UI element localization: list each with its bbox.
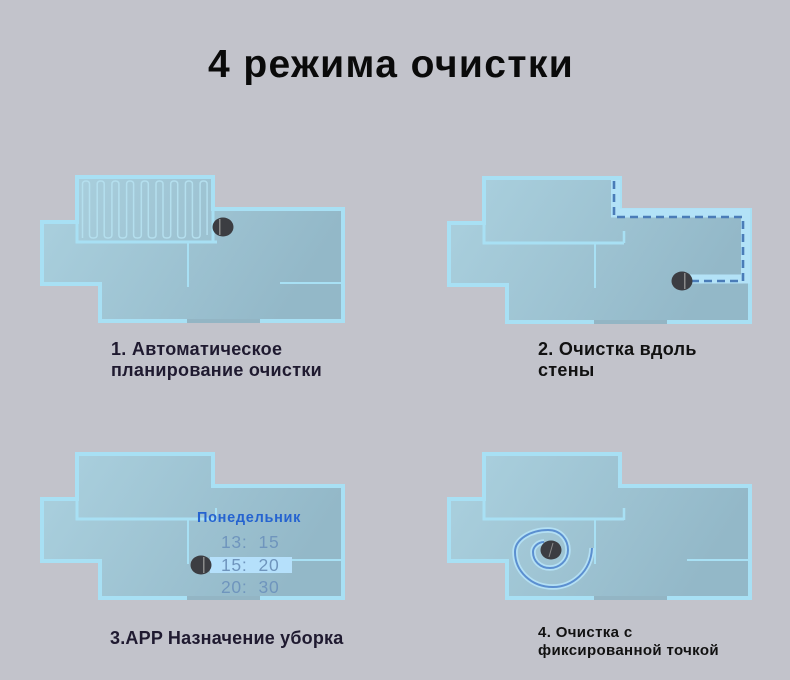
spiral path [515,530,592,587]
cleaning path zigzag [82,181,207,238]
spiral glow [515,530,592,587]
caption 2: 2. Очистка вдоль [538,339,697,359]
panel: map 3 app schedule [42,454,343,600]
day label: Понедельник [197,510,301,526]
caption 3: 3.APP Назначение уборка [110,628,343,648]
icon: robot vacuum [212,218,234,236]
icon: robot vacuum [540,540,562,560]
icon: robot vacuum [190,556,212,574]
dashed wall path [614,181,743,281]
selected time highlight [210,557,292,573]
caption 2: стены [538,360,595,380]
caption 4 [538,624,719,659]
panel: map 2 along the wall [449,178,750,324]
caption 1 [111,339,322,380]
time options: 13: 15 [221,532,279,552]
time options: 15: 20 [221,555,279,575]
panel: map 4 spot cleaning [449,454,750,600]
cleaning path highlight [616,180,746,279]
caption 4: 4. Очистка с [538,624,633,641]
caption 2 [538,339,697,380]
caption 4: фиксированной точкой [538,642,719,659]
title: 4 режима очистки [208,43,574,86]
time options: 20: 30 [221,577,279,597]
time options [221,532,279,597]
caption 1: 1. Автоматическое [111,339,282,359]
panel: map 1 automatic planning [42,177,343,323]
icon: robot vacuum [672,272,692,290]
caption 1: планирование очистки [111,360,322,380]
